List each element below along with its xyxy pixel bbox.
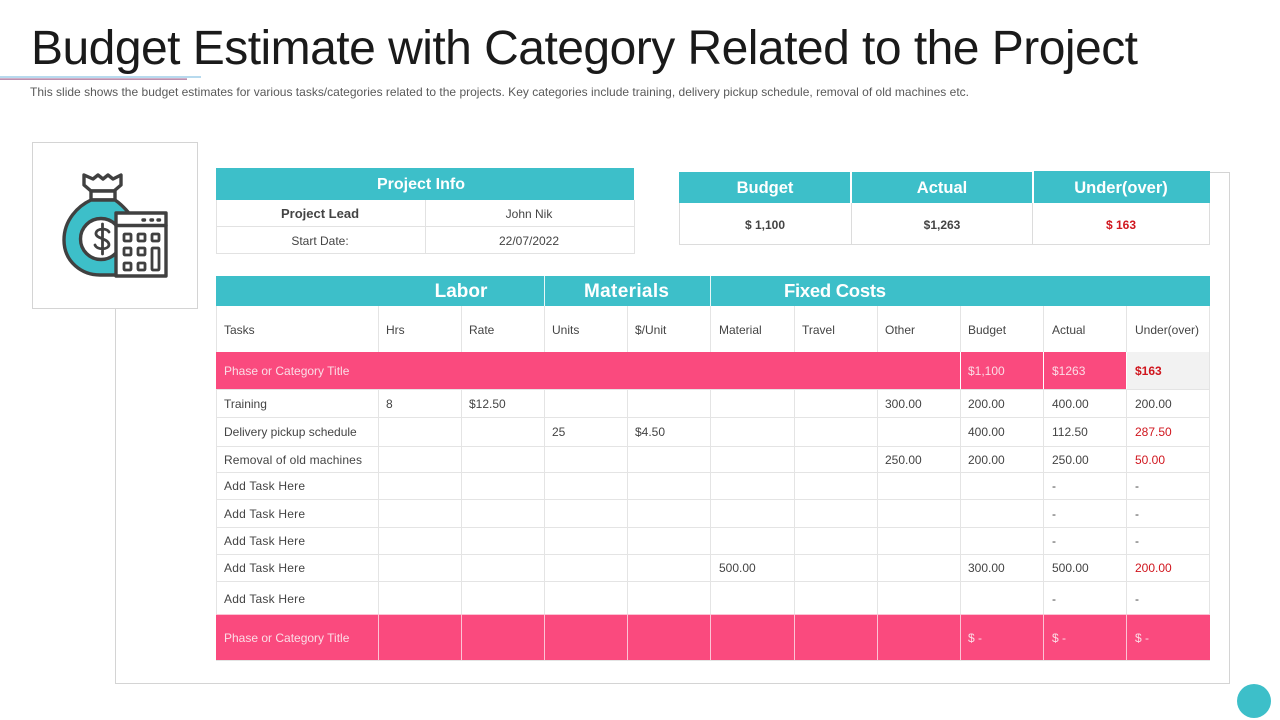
row: add task 4: Add Task Here: [224, 561, 305, 575]
start date row: 22/07/2022: [499, 234, 559, 248]
row: delivery pickup schedule: 112.50: [1052, 425, 1088, 439]
column headings: Budget: [968, 323, 1007, 337]
budget summary values: [745, 218, 1136, 232]
row: add task 1: -: [1135, 479, 1139, 493]
title: Budget Estimate with Category Related to the Project: [31, 22, 1138, 75]
row: training: $12.50: [469, 397, 506, 411]
row: add task 2: [224, 507, 1139, 521]
row: delivery pickup schedule: Delivery pickup schedule: [224, 425, 357, 439]
page marker circle: [1237, 684, 1271, 718]
row: training: 8: [386, 397, 393, 411]
main table header band: Labor: [435, 281, 488, 302]
row: removal of old machines: 50.00: [1135, 453, 1165, 467]
start date row: Start Date:: [291, 234, 349, 248]
budget summary header: [679, 171, 1210, 203]
panel: outer frame: [116, 172, 1230, 684]
phase row 2 text: [224, 631, 1149, 645]
row: add task 5: Add Task Here: [224, 592, 305, 606]
pink phase row 2: [216, 614, 1210, 660]
row: removal of old machines: [224, 453, 1165, 467]
row: removal of old machines: Removal of old machines: [224, 453, 362, 467]
row: add task 4: 500.00: [719, 561, 756, 575]
table: budget summary: [679, 171, 1210, 244]
row: add task 1: -: [1052, 479, 1056, 493]
phase row 1 text: $1,100: [968, 364, 1005, 378]
row: delivery pickup schedule: 287.50: [1135, 425, 1172, 439]
project lead row: [281, 206, 553, 221]
row: removal of old machines: 250.00: [885, 453, 922, 467]
row: delivery pickup schedule: 400.00: [968, 425, 1005, 439]
column headings: $/Unit: [635, 323, 667, 337]
column headings: Units: [552, 323, 579, 337]
phase row 2 text: $ -: [968, 631, 982, 645]
row: delivery pickup schedule: 25: [552, 425, 566, 439]
budget summary header: Under(over): [1074, 179, 1168, 197]
budget summary values: $1,263: [924, 218, 961, 232]
row: training: Training: [224, 397, 267, 411]
row: add task 3: -: [1052, 534, 1056, 548]
row: add task 5: -: [1135, 592, 1139, 606]
pink phase row 1: [216, 352, 1210, 389]
row: add task 3: Add Task Here: [224, 534, 305, 548]
column headings: Under(over): [1135, 323, 1199, 337]
phase row 1 text: $1263: [1052, 364, 1086, 378]
project info header: [216, 168, 634, 200]
row: add task 3: -: [1135, 534, 1139, 548]
title underline: [0, 76, 201, 80]
row: add task 4: 200.00: [1135, 561, 1172, 575]
budget summary values: $ 163: [1106, 218, 1136, 232]
row: delivery pickup schedule: [224, 425, 1172, 439]
row: add task 4: 300.00: [968, 561, 1005, 575]
start date row: [291, 234, 559, 248]
row: add task 3: [224, 534, 1139, 548]
row: training: 400.00: [1052, 397, 1089, 411]
row: training: [224, 397, 1172, 411]
row: removal of old machines: 250.00: [1052, 453, 1089, 467]
row: training: 300.00: [885, 397, 922, 411]
icon: money bag with calculator: [64, 175, 166, 276]
column headings: Travel: [802, 323, 835, 337]
row: training: 200.00: [968, 397, 1005, 411]
column headings: [224, 323, 1199, 337]
table: main budget: [216, 276, 1210, 660]
row: add task 1: Add Task Here: [224, 479, 305, 493]
column headings: Other: [885, 323, 915, 337]
budget summary values: $ 1,100: [745, 218, 785, 232]
project info header: Project Info: [377, 176, 465, 193]
phase row 2 text: $ -: [1135, 631, 1149, 645]
budget summary header: Actual: [917, 179, 967, 197]
column headings: Material: [719, 323, 762, 337]
row: add task 5: -: [1052, 592, 1056, 606]
column headings: Rate: [469, 323, 495, 337]
subtitle: This slide shows the budget estimates for various tasks/categories related to the projects. Key categories include training, delivery pickup schedule, removal of old machines etc.: [30, 85, 969, 99]
row: delivery pickup schedule: $4.50: [635, 425, 665, 439]
phase row 1 text: Phase or Category Title: [224, 364, 350, 378]
row: removal of old machines: 200.00: [968, 453, 1005, 467]
row: add task 1: [224, 479, 1139, 493]
column headings: Tasks: [224, 323, 255, 337]
project lead row: Project Lead: [281, 206, 359, 221]
row: add task 4: [224, 561, 1172, 575]
phase row 2 text: Phase or Category Title: [224, 631, 350, 645]
row: add task 2: Add Task Here: [224, 507, 305, 521]
row: training: 200.00: [1135, 397, 1172, 411]
phase row 2 text: $ -: [1052, 631, 1066, 645]
row: add task 5: [224, 592, 1139, 606]
project lead row: John Nik: [506, 207, 553, 221]
budget summary header: Budget: [737, 179, 794, 197]
column headings: Actual: [1052, 323, 1085, 337]
phase row 1 text: [224, 364, 1162, 378]
row: add task 2: -: [1135, 507, 1139, 521]
main table header band: Fixed Costs: [784, 280, 886, 301]
phase row 1 text: $163: [1135, 364, 1162, 378]
table: project info: [216, 168, 634, 254]
panel: icon box: [32, 142, 198, 308]
main table header band: [216, 276, 1210, 306]
column headings: Hrs: [386, 323, 405, 337]
row: add task 2: -: [1052, 507, 1056, 521]
row: add task 4: 500.00: [1052, 561, 1089, 575]
main table header band: Materials: [584, 281, 669, 302]
